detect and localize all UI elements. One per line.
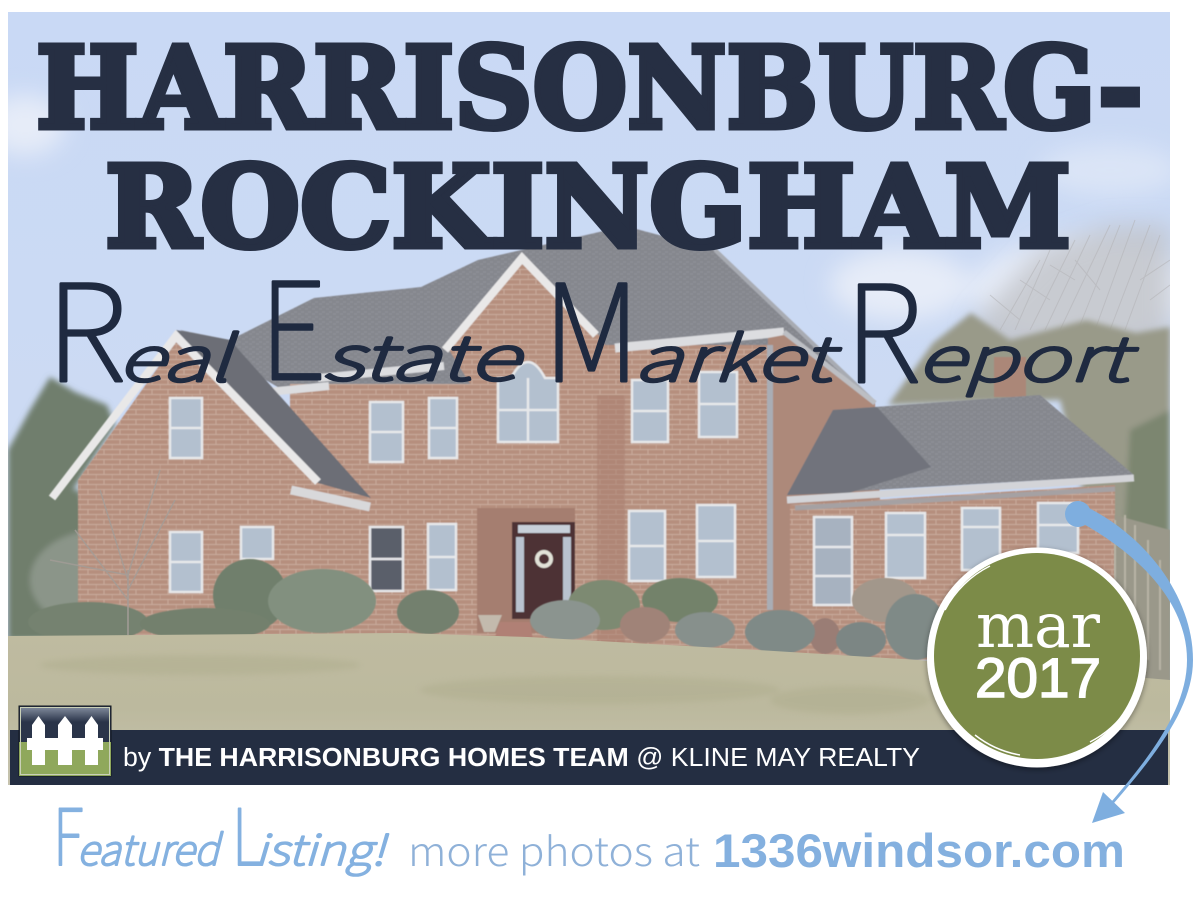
headline line 2: ROCKINGHAM xyxy=(105,142,1071,274)
upper cornices xyxy=(268,332,784,392)
front door xyxy=(512,522,575,619)
porch xyxy=(477,508,575,633)
arrow start dot xyxy=(1065,501,1091,527)
bare trees right xyxy=(975,225,1170,360)
date badge xyxy=(927,548,1147,768)
shrubs xyxy=(28,559,945,660)
main roof xyxy=(180,228,841,388)
badge year: 2017 xyxy=(975,646,1101,709)
word: Real: eal xyxy=(118,309,239,399)
word: Market: M xyxy=(543,226,640,420)
word: Market: arket xyxy=(634,309,841,399)
front steps xyxy=(495,622,532,637)
central gable xyxy=(450,264,605,384)
word: Report: eport xyxy=(917,309,1138,399)
bare branches xyxy=(990,220,1170,330)
word: Listing!: L xyxy=(232,776,262,888)
downspout xyxy=(767,345,773,610)
featured listing script xyxy=(53,776,389,888)
word: Report: R xyxy=(845,227,921,421)
right roof rake xyxy=(784,332,875,403)
clouds xyxy=(0,95,1190,340)
byline: by THE HARRISONBURG HOMES TEAM @ KLINE MAY REALTY xyxy=(123,744,920,772)
windows xyxy=(170,362,1078,605)
subtitle script xyxy=(46,224,1138,421)
bottom band xyxy=(10,730,1168,785)
logo gloss xyxy=(21,708,109,722)
word: Estate: state xyxy=(322,308,526,398)
window muntins xyxy=(170,378,1078,576)
right side wall xyxy=(768,334,880,612)
urn xyxy=(478,615,502,632)
chimney xyxy=(994,357,1026,397)
lawn xyxy=(8,633,1170,785)
left gable trim xyxy=(52,336,318,498)
main brick wall xyxy=(290,384,780,654)
web address: 1336windsor.com xyxy=(713,824,1125,877)
word: Real: R xyxy=(46,226,126,420)
arrow head xyxy=(1092,792,1125,823)
word: Estate xyxy=(260,224,526,418)
arrow from house to web address xyxy=(1065,501,1193,823)
word: Estate: E xyxy=(260,224,326,418)
logo: white picket fence xyxy=(19,706,111,776)
left gable roof xyxy=(176,330,371,498)
logo tile grass xyxy=(19,742,111,776)
word: Listing! xyxy=(232,776,389,888)
word: Listing!: isting! xyxy=(255,817,389,878)
tall ornamental grass xyxy=(1115,515,1170,700)
wing brick xyxy=(790,485,1115,660)
left gable brick xyxy=(78,342,291,636)
word: Featured: eatured xyxy=(77,817,223,878)
sky xyxy=(8,12,1170,680)
left porch eave xyxy=(291,490,370,507)
word: Market xyxy=(543,226,841,420)
lawn mottling xyxy=(60,659,922,710)
word: Report xyxy=(845,227,1138,421)
evergreen trees right xyxy=(888,313,1170,700)
word: Featured xyxy=(53,776,223,888)
arrow curve xyxy=(1080,506,1193,803)
badge fill xyxy=(934,553,1140,759)
fence xyxy=(27,716,103,765)
headline line 1: HARRISONBURG- xyxy=(36,24,1143,154)
wing roof shadow xyxy=(787,407,931,495)
word: Featured: F xyxy=(53,776,83,888)
badge month: mar xyxy=(976,589,1100,662)
main roof right trim xyxy=(715,250,875,403)
wing roof xyxy=(856,395,1134,492)
badge brushed edge xyxy=(945,566,1128,755)
logo tile sky xyxy=(19,706,111,776)
tower shade xyxy=(597,395,625,655)
house group xyxy=(52,226,1134,660)
badge rim xyxy=(927,548,1147,768)
logo frame xyxy=(20,708,110,774)
bare small tree xyxy=(50,470,175,635)
evergreen trees left xyxy=(8,374,118,636)
more photos text: more photos at xyxy=(408,820,700,878)
central gable trim xyxy=(445,258,596,350)
wreath xyxy=(537,552,551,566)
word: Real xyxy=(46,226,239,420)
wing gutter xyxy=(787,478,1134,500)
